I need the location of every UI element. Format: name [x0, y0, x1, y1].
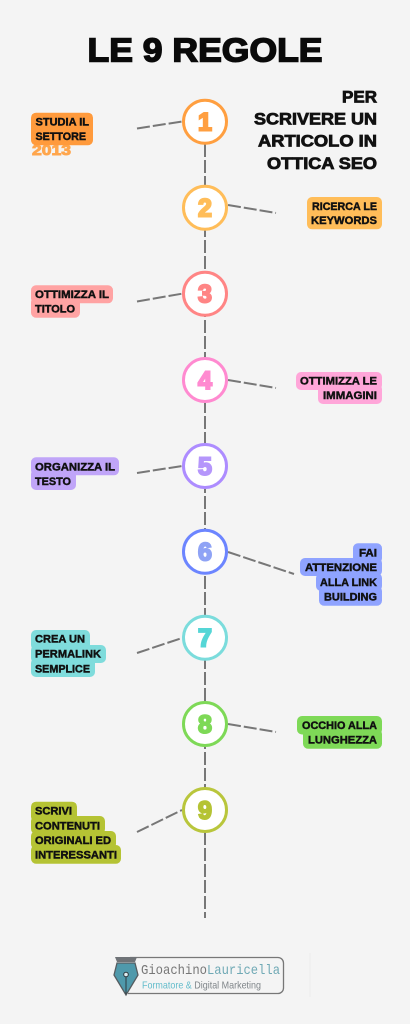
label 2 — [307, 197, 382, 229]
label 7: CREA UN — [35, 634, 85, 646]
badge 2 — [184, 186, 226, 229]
label 8: LUNGHEZZA — [308, 735, 377, 747]
label 9: CONTENUTI — [35, 820, 100, 832]
step 5 — [31, 444, 226, 490]
subtitle: PER — [342, 88, 377, 106]
step 7 — [31, 616, 226, 677]
subtitle: OTTICA SEO — [267, 155, 377, 173]
step 8 — [184, 702, 382, 749]
label 3: TITOLO — [35, 304, 75, 316]
badge 6 — [184, 530, 226, 573]
timeline vertical dashed line — [204, 144, 206, 918]
step 1 — [31, 100, 226, 159]
label 5: ORGANIZZA IL — [35, 461, 115, 473]
label 9: INTERESSANTI — [35, 850, 117, 862]
step 9 — [31, 788, 226, 864]
label 4: IMMAGINI — [323, 390, 377, 402]
label 4 — [296, 372, 382, 404]
badge 9 — [184, 788, 226, 832]
badge 7: 7 — [198, 624, 212, 652]
icon: pen nib — [114, 957, 138, 995]
label 9: ORIGINALI ED — [35, 835, 111, 847]
connector 8 — [228, 724, 276, 732]
badge 4: 4 — [198, 367, 212, 395]
subtitle — [254, 88, 377, 173]
badge 7 — [184, 616, 226, 659]
label 5: TESTO — [35, 476, 71, 488]
badge 3: 3 — [198, 280, 212, 308]
step 2 — [184, 186, 382, 229]
connector 6 — [228, 552, 294, 574]
label 2: KEYWORDS — [311, 215, 377, 227]
badge 8 — [184, 702, 226, 746]
badge 4 — [184, 358, 226, 402]
label 9: SCRIVI — [35, 806, 72, 818]
label 6 — [300, 543, 382, 606]
label 3: OTTIMIZZA IL — [35, 289, 109, 301]
label 9 — [31, 802, 121, 864]
logo tagline: Formatore & Digital Marketing — [142, 980, 261, 992]
subtitle: SCRIVERE UN — [254, 111, 377, 129]
label 8: OCCHIO ALLA — [302, 720, 377, 732]
connector 2 — [228, 205, 276, 213]
step 4 — [184, 358, 382, 404]
badge 6: 6 — [198, 538, 212, 566]
title: LE 9 REGOLE — [88, 32, 322, 69]
label 2: RICERCA LE — [312, 201, 377, 213]
label 6: ATTENZIONE — [305, 562, 377, 574]
badge 3 — [184, 272, 226, 315]
logo frame — [128, 958, 284, 994]
label 4: OTTIMIZZA LE — [300, 375, 377, 387]
label 1: SETTORE — [36, 131, 86, 143]
badge 5 — [184, 444, 226, 488]
label 7 — [31, 630, 106, 677]
badge 8: 8 — [198, 711, 212, 739]
label 6: ALLA LINK — [320, 577, 377, 589]
label 6: FAI — [359, 547, 377, 559]
badge 9: 9 — [198, 797, 212, 825]
label 1: STUDIA IL — [36, 116, 89, 128]
subtitle: ARTICOLO IN — [258, 133, 377, 151]
connector 5 — [137, 466, 182, 473]
logo — [114, 957, 284, 995]
label 5 — [31, 457, 119, 490]
connector 3 — [137, 294, 182, 302]
label 6: BUILDING — [324, 592, 377, 604]
stray year text: 2013 — [32, 143, 71, 159]
badge 2: 2 — [198, 194, 212, 222]
step 3 — [31, 272, 226, 318]
badge 5: 5 — [198, 453, 212, 481]
badge 1: 1 — [198, 108, 212, 136]
connector 9 — [137, 810, 182, 832]
connector 1 — [137, 122, 182, 128]
logo: Lauricella — [207, 963, 280, 979]
step 6 — [184, 530, 382, 606]
label 1 — [31, 113, 93, 145]
badge 1 — [184, 100, 226, 143]
connector 4 — [228, 380, 276, 388]
label 7: PERMALINK — [35, 648, 101, 660]
label 3 — [31, 285, 113, 318]
logo name: Gioachino — [141, 963, 207, 979]
label 8 — [297, 716, 382, 749]
connector 7 — [137, 638, 182, 653]
label 7: SEMPLICE — [35, 663, 90, 675]
